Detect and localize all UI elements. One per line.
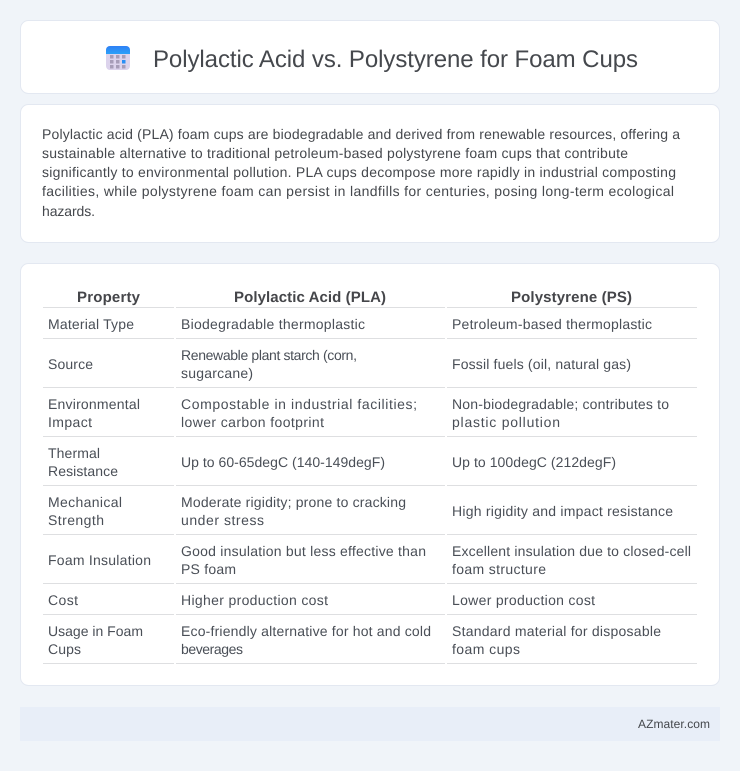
panel: title header: [20, 20, 720, 94]
row: cost: Lower production cost: [452, 592, 595, 608]
row: thermal resistance: Thermal: [48, 445, 100, 461]
row: environmental impact: Compostable in industrial facilities;: [181, 396, 417, 412]
row: foam insulation: foam structure: [452, 561, 546, 577]
row: environmental impact: [43, 396, 697, 437]
row: foam insulation: [43, 543, 697, 584]
row: mechanical strength: [43, 494, 697, 535]
row: material type: Petroleum-based thermoplastic: [452, 316, 652, 332]
row: mechanical strength: Mechanical: [48, 494, 122, 510]
text block: summary: sustainable alternative to traditional petroleum-based polystyrene foam cups that contribute: [42, 145, 628, 161]
panel: comparison table: [20, 264, 720, 686]
row: usage in foam cups: Eco-friendly alternative for hot and cold: [181, 623, 431, 639]
row: environmental impact: Impact: [48, 414, 92, 430]
row: foam insulation: Good insulation but less effective than: [181, 543, 426, 559]
row: mechanical strength: Moderate rigidity; prone to cracking: [181, 494, 406, 510]
text block: summary: hazards.: [42, 203, 95, 219]
row: foam insulation: PS foam: [181, 561, 236, 577]
row: thermal resistance: Up to 60-65degC (140-149degF): [181, 454, 385, 470]
table header row: [43, 289, 697, 308]
row: foam insulation: Foam Insulation: [48, 552, 151, 568]
row: usage in foam cups: Cups: [48, 641, 81, 657]
row: source: [43, 347, 697, 388]
text block: summary: [42, 126, 680, 219]
row: material type: Material Type: [48, 316, 134, 332]
row: mechanical strength: under stress: [181, 512, 264, 528]
row: cost: Higher production cost: [181, 592, 328, 608]
row: thermal resistance: [43, 445, 697, 486]
text block: summary: facilities, while polystyrene foam can persist in landfills for centuries, posing long-term ecological: [42, 183, 674, 199]
row: environmental impact: plastic pollution: [452, 414, 560, 430]
panel: summary paragraph: [20, 104, 720, 242]
row: thermal resistance: Resistance: [48, 463, 118, 479]
row: source: Source: [48, 356, 93, 372]
footer bar: [20, 707, 720, 741]
table header row: Polylactic Acid (PLA): [234, 289, 386, 306]
row: usage in foam cups: foam cups: [452, 641, 520, 657]
title: Polylactic Acid vs. Polystyrene for Foam Cups: [153, 46, 638, 73]
row: cost: [43, 592, 697, 615]
row: source: sugarcane): [181, 365, 253, 381]
row: environmental impact: lower carbon footprint: [181, 414, 324, 430]
icon: calendar grid: [106, 46, 130, 70]
footer credit: AZmater.com: [638, 717, 710, 731]
row: usage in foam cups: beverages: [181, 641, 243, 657]
row: mechanical strength: Strength: [48, 512, 104, 528]
table header row: Polystyrene (PS): [511, 289, 632, 306]
row: usage in foam cups: Standard material for disposable: [452, 623, 661, 639]
table header row: Property: [77, 289, 141, 306]
row: environmental impact: Non-biodegradable; contributes to: [452, 396, 669, 412]
row: material type: [43, 316, 697, 339]
row: usage in foam cups: [43, 623, 697, 664]
row: environmental impact: Environmental: [48, 396, 140, 412]
row: usage in foam cups: Usage in Foam: [48, 623, 143, 639]
text block: summary: significantly to environmental pollution. PLA cups decompose more rapidly in industrial composting: [42, 164, 676, 180]
row: foam insulation: Excellent insulation due to closed-cell: [452, 543, 691, 559]
row: thermal resistance: Up to 100degC (212degF): [452, 454, 616, 470]
row: source: Renewable plant starch (corn,: [181, 347, 357, 363]
row: cost: Cost: [48, 592, 78, 608]
row: mechanical strength: High rigidity and impact resistance: [452, 503, 673, 519]
row: material type: Biodegradable thermoplastic: [181, 316, 365, 332]
text block: summary: Polylactic acid (PLA) foam cups are biodegradable and derived from renewable resources, offering a: [42, 126, 680, 142]
row: source: Fossil fuels (oil, natural gas): [452, 356, 631, 372]
